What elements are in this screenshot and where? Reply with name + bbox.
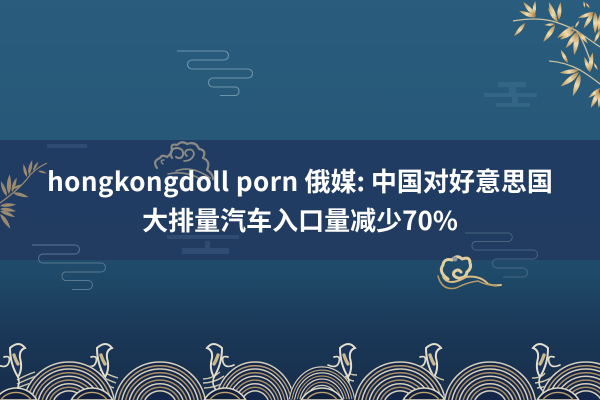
title: 大排量汽车入口量减少70%	[142, 201, 458, 238]
cloud line: lower left	[32, 245, 106, 290]
wave humps	[23, 361, 600, 400]
cloud line: top centre	[177, 51, 252, 96]
title: hongkongdoll porn 俄媒:中国对好意思国	[47, 162, 553, 199]
translucent title band	[0, 140, 600, 260]
bamboo: left muted	[0, 160, 47, 230]
lower wave humps	[0, 388, 579, 400]
title	[47, 162, 553, 238]
wave crests	[0, 344, 560, 391]
decorative bars in band	[47, 144, 239, 254]
wave background lines	[17, 368, 556, 390]
cloud line: lower right	[465, 233, 538, 277]
cloud scroll: muted, behind title	[155, 142, 213, 180]
gold cloud	[438, 256, 501, 288]
bamboo: top right gold	[513, 1, 600, 109]
decorative stacked bars: top right	[484, 82, 537, 107]
